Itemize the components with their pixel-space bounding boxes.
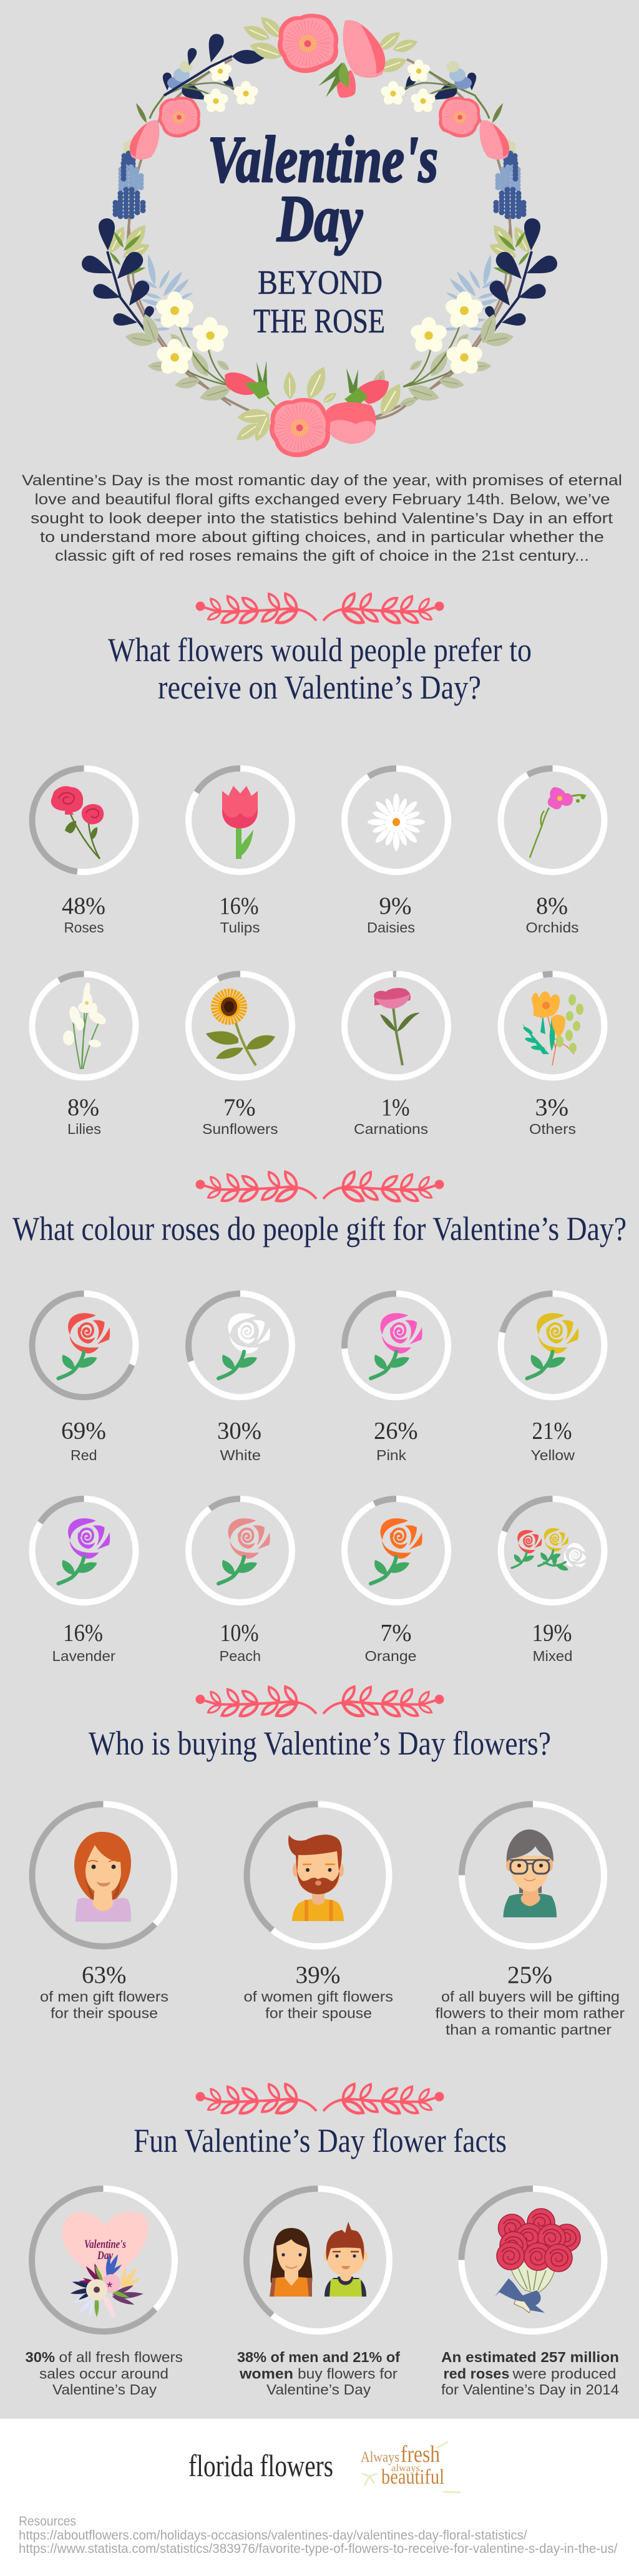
stat: white roses: White — [220, 1447, 261, 1463]
stat: yellow roses: 21% — [532, 1417, 572, 1445]
stat: others — [500, 974, 604, 1137]
text block: red roses — [443, 2365, 509, 2381]
text block — [243, 1988, 393, 2021]
stat: women — [243, 1804, 393, 2021]
logo: always fresh always beautiful: always — [391, 2463, 420, 2474]
stat: sunflowers: 7% — [223, 1094, 256, 1121]
fact: fresh flower sales — [25, 2189, 183, 2398]
text block: for their spouse — [51, 2005, 158, 2021]
icon: woman — [74, 1832, 131, 1922]
text block: 30% — [25, 2349, 55, 2365]
stat: lavender roses — [32, 1499, 136, 1664]
text block — [40, 1988, 168, 2021]
logo: always fresh always beautiful: fresh — [401, 2441, 440, 2467]
title: THE ROSE — [253, 302, 385, 340]
intro text: to understand more about gifting choices, and in particular whether the — [40, 529, 604, 546]
stat: peach roses: 10% — [220, 1619, 258, 1647]
resources: https://aboutflowers.com/holidays-occasions/valentines-day/valentines-day-floral-statistics/ — [19, 2529, 527, 2542]
icon: mixed roses — [512, 1528, 592, 1584]
stat: sunflowers: Sunflowers — [202, 1121, 278, 1137]
stat: orange roses: Orange — [364, 1648, 417, 1664]
resources: Resources — [19, 2514, 76, 2529]
intro text — [22, 472, 622, 564]
logo: always fresh always beautiful: Always — [361, 2449, 399, 2466]
fact: red roses produced — [441, 2189, 619, 2398]
text block: for their spouse — [265, 2005, 372, 2021]
stat: orchids: Orchids — [525, 919, 579, 936]
icon: rose bouquet — [495, 2209, 580, 2313]
stat: tulips — [188, 768, 292, 936]
stat: others: Others — [529, 1121, 576, 1137]
stat: women: 39% — [296, 1962, 341, 1988]
icon: heart and bouquet: Valentine's — [84, 2238, 126, 2251]
stat: orange roses: 7% — [381, 1619, 412, 1647]
stat: carnations: Carnations — [354, 1121, 428, 1137]
icon: carnation — [374, 988, 420, 1065]
stat: men: 63% — [82, 1962, 126, 1988]
top flower cluster — [164, 12, 419, 98]
intro text: love and beautiful floral gifts exchanged every February 14th. Below, we’ve — [35, 491, 610, 508]
title: Valentine's — [208, 123, 438, 196]
stat: white roses — [188, 1294, 292, 1463]
logo: always fresh always beautiful — [361, 2441, 461, 2492]
text block: of all fresh flowers — [59, 2349, 183, 2365]
icon: heart and bouquet — [62, 2212, 149, 2320]
title: BEYOND — [258, 263, 383, 301]
stat: pink roses — [344, 1294, 448, 1463]
stat: daisies: Daisies — [367, 919, 415, 936]
stat: white roses: 30% — [217, 1417, 261, 1445]
stat: carnations: 1% — [381, 1094, 409, 1121]
text block: of men gift flowers — [40, 1988, 168, 2005]
text block — [237, 2349, 400, 2398]
icon: older woman — [503, 1829, 557, 1917]
heading: buyers: Who is buying Valentine’s Day flowers? — [89, 1725, 551, 1762]
text block: Valentine’s Day — [266, 2381, 371, 2398]
stat: peach roses — [188, 1499, 292, 1664]
stat: roses: 48% — [62, 893, 105, 919]
stat: orange roses — [344, 1499, 448, 1664]
divider 4 — [196, 2082, 444, 2116]
title: Day — [276, 182, 363, 255]
stat: pink roses: 26% — [374, 1417, 418, 1445]
heading: flowers preferred: receive on Valentine’s Day? — [158, 669, 481, 706]
stat: lilies — [32, 974, 136, 1137]
stat: lilies: 8% — [67, 1094, 99, 1121]
text block: were produced — [512, 2365, 617, 2381]
text block — [436, 1988, 625, 2038]
text block: of women gift flowers — [243, 1988, 393, 2005]
heading: fun facts: Fun Valentine’s Day flower facts — [134, 2122, 507, 2159]
text block: An estimated 257 million — [441, 2349, 619, 2365]
stat: others: 3% — [535, 1094, 568, 1121]
icon: lilies — [63, 982, 108, 1069]
intro text: classic gift of red roses remains the gift of choice in the 21st century... — [55, 548, 589, 564]
stat: mixed roses: Mixed — [533, 1648, 573, 1664]
fact: men and women buyers — [237, 2189, 400, 2398]
stat: red roses: Red — [71, 1447, 97, 1463]
icon: heart and bouquet: Day — [97, 2249, 113, 2262]
heading: flowers preferred — [108, 631, 532, 706]
icon: couple — [270, 2222, 368, 2297]
stat: tulips: Tulips — [220, 919, 260, 936]
icon: mixed bouquet — [522, 992, 583, 1065]
stat: moms: 25% — [507, 1962, 552, 1988]
icon: tulip — [222, 786, 258, 859]
panel: flower preferences — [32, 768, 604, 1137]
text block: Valentine’s Day — [52, 2381, 157, 2398]
text block: flowers to their mom rather — [436, 2005, 625, 2021]
divider 1 — [196, 591, 444, 626]
divider 2 — [196, 1169, 444, 1204]
text block: for Valentine’s Day in 2014 — [441, 2381, 619, 2398]
stat: yellow roses — [500, 1294, 604, 1463]
stat: lilies: Lilies — [67, 1121, 101, 1137]
logo: florida flowers: florida flowers — [188, 2448, 333, 2483]
logo: always fresh always beautiful: beautiful — [381, 2466, 444, 2489]
footer background — [0, 2419, 639, 2576]
bottom flower cluster — [225, 361, 419, 457]
stat: moms — [436, 1804, 625, 2038]
stat: carnations — [344, 974, 448, 1137]
stat: tulips: 16% — [220, 893, 258, 919]
text block: than a romantic partner — [446, 2022, 612, 2038]
stat: mixed roses: 19% — [532, 1619, 572, 1647]
text block: buy flowers for — [298, 2365, 398, 2381]
stat: red roses — [32, 1294, 136, 1463]
icon: roses — [51, 786, 104, 859]
icon: orchid — [530, 787, 586, 858]
floral wreath — [79, 12, 560, 457]
icon: bearded man — [288, 1834, 344, 1921]
stat: men — [32, 1804, 175, 2021]
stat: lavender roses: 16% — [63, 1619, 103, 1647]
panel: rose colours — [32, 1294, 604, 1664]
stat: orchids: 8% — [536, 893, 568, 919]
resources: https://www.statista.com/statistics/383976/favorite-type-of-flowers-to-receive-for-valentine-s-day-in-the-us/ — [19, 2542, 618, 2556]
text block: women — [239, 2365, 293, 2381]
icon: daisy — [368, 793, 425, 851]
intro text: Valentine’s Day is the most romantic day of the year, with promises of eternal — [22, 472, 622, 489]
stat: sunflowers — [188, 974, 292, 1137]
resources — [19, 2514, 618, 2556]
stat: lavender roses: Lavender — [52, 1648, 115, 1664]
text block: of all buyers will be gifting — [441, 1988, 620, 2005]
text block — [441, 2349, 619, 2398]
stat: daisies — [344, 768, 448, 936]
stat: pink roses: Pink — [376, 1447, 407, 1463]
stat: red roses: 69% — [61, 1417, 106, 1445]
intro text: sought to look deeper into the statistics behind Valentine’s Day in an effort — [31, 510, 613, 527]
icon: heart and bouquet: * — [107, 2279, 112, 2296]
stat: peach roses: Peach — [220, 1648, 261, 1664]
heading: flowers preferred: What flowers would people prefer to — [108, 631, 532, 669]
text block — [25, 2349, 183, 2398]
text block: 38% of men and 21% of — [237, 2349, 400, 2365]
stat: orchids — [500, 768, 604, 936]
stat: mixed roses — [500, 1499, 604, 1664]
stat: roses — [32, 768, 136, 936]
divider 3 — [196, 1685, 444, 1719]
panel: buyers — [32, 1804, 625, 2038]
stat: roses: Roses — [64, 919, 104, 936]
title — [208, 123, 438, 340]
stat: yellow roses: Yellow — [530, 1447, 575, 1463]
panel: fun facts — [25, 2189, 619, 2398]
icon: sunflower — [206, 994, 275, 1065]
text block: sales occur around — [39, 2365, 168, 2381]
stat: daisies: 9% — [379, 893, 412, 919]
